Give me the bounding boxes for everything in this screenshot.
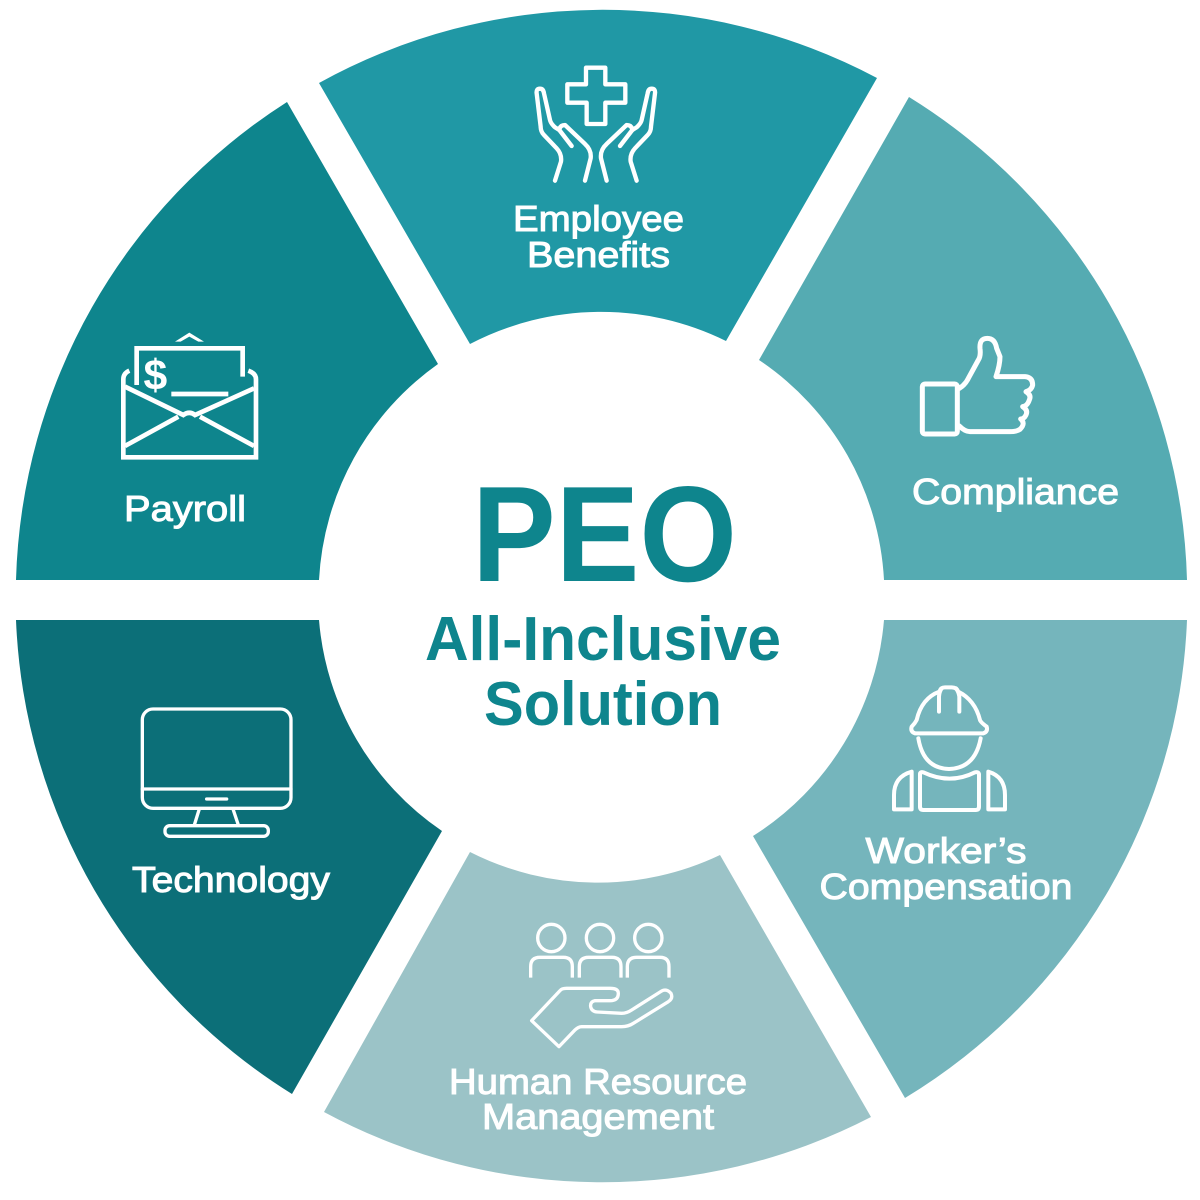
panel: compliance (759, 97, 1187, 580)
panel: employee benefits (319, 10, 877, 344)
label: employee benefits (513, 198, 684, 275)
panel: human resource management (324, 852, 871, 1182)
center title (425, 458, 781, 739)
label: payroll: Payroll (124, 488, 246, 529)
label: human resource management (449, 1061, 747, 1137)
center title: Solution (484, 670, 722, 739)
panel: worker's compensation (753, 620, 1187, 1098)
icon: hands holding medical cross (537, 68, 655, 181)
label: human resource management: Human Resource (449, 1061, 747, 1102)
label: technology: Technology (132, 859, 330, 900)
icon: worker with hard hat (894, 687, 1005, 810)
dollar sign: $ (143, 351, 167, 399)
icon: thumbs up (922, 338, 1033, 434)
label: employee benefits: Benefits (527, 234, 670, 275)
label: employee benefits: Employee (513, 198, 684, 239)
icon: desktop monitor (142, 709, 291, 836)
label: human resource management: Management (482, 1096, 714, 1137)
center title: PEO (472, 458, 737, 610)
center title: All-Inclusive (425, 605, 781, 674)
icon: people above open hand (531, 924, 672, 1047)
label: compliance: Compliance (912, 471, 1119, 512)
label: worker's compensation (820, 830, 1072, 907)
label: worker's compensation: Compensation (820, 866, 1072, 907)
panel: technology (16, 620, 442, 1094)
panel: payroll (16, 102, 438, 580)
label: worker's compensation: Worker’s (866, 830, 1026, 871)
icon: envelope with pay cheque (123, 333, 256, 457)
